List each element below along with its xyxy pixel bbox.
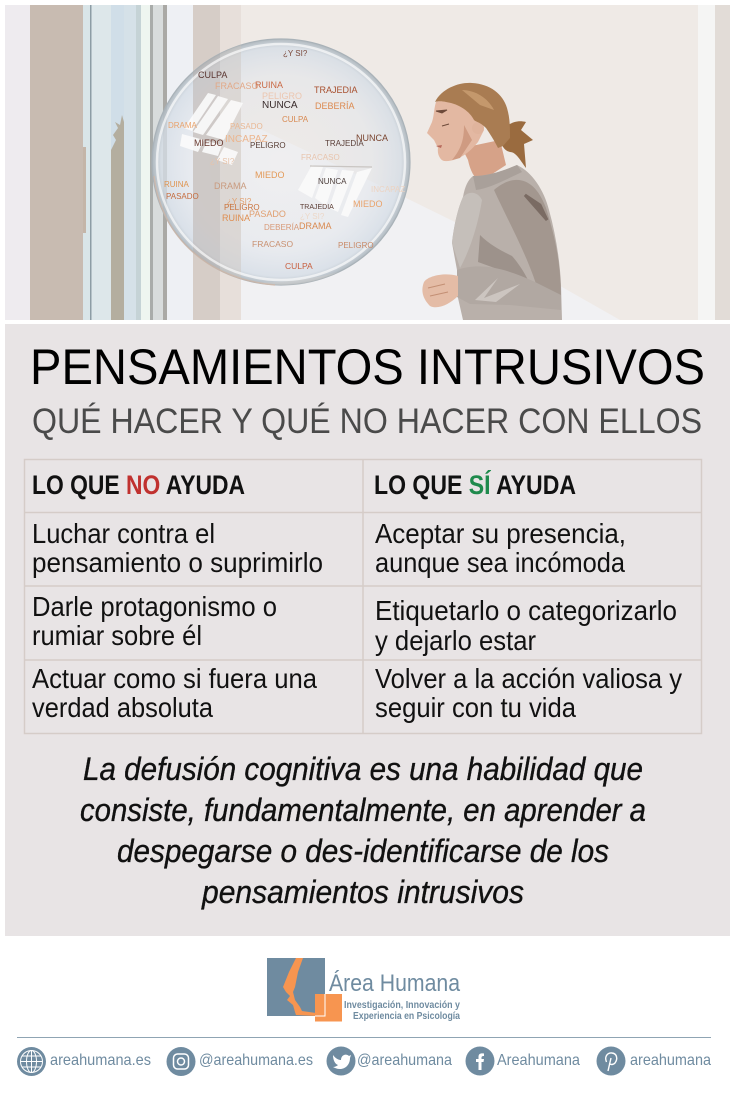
left column rows: rumiar sobre él (32, 620, 202, 651)
title: PENSAMIENTOS INTRUSIVOS (30, 339, 705, 395)
sweater (452, 165, 562, 320)
instagram (166, 1047, 313, 1076)
comparison table (24, 459, 702, 734)
left column rows (32, 518, 323, 723)
pinterest: areahumana (630, 1052, 711, 1069)
right column rows (375, 518, 682, 723)
facebook (466, 1046, 580, 1076)
twitter (326, 1046, 452, 1076)
bubble words: PELIGRO (338, 241, 374, 250)
bubble words: NUNCA (356, 133, 388, 143)
bubble words: MIEDO (255, 170, 285, 180)
bubble words: INCAPAZ (225, 134, 268, 145)
left column rows: Actuar como si fuera una (32, 663, 317, 694)
hands (422, 274, 458, 307)
neck (465, 141, 506, 176)
face (427, 101, 484, 162)
bubble words: DEBERÍA (264, 223, 300, 232)
facebook: Areahumana (497, 1052, 580, 1069)
bubble words: RUINA (255, 80, 283, 90)
illustration: woman looking at a thought bubble (5, 5, 730, 320)
bubble words: DRAMA (214, 181, 247, 191)
left column rows: pensamiento o suprimirlo (32, 547, 323, 578)
right column rows: aunque sea incómoda (375, 547, 625, 578)
left column rows: Darle protagonismo o (32, 591, 277, 622)
bubble words: FRACASO (301, 153, 340, 162)
bubble words: NUNCA (262, 100, 298, 111)
italic statement: La defusión cognitiva es una habilidad que (83, 751, 643, 787)
bubble words: INCAPAZ (371, 185, 405, 194)
left column rows: Luchar contra el (32, 518, 215, 549)
right column rows: Aceptar su presencia, (375, 518, 626, 549)
logo: Área Humana: Investigación, Innovación y (344, 1000, 460, 1011)
ponytail (501, 121, 533, 168)
pinterest (596, 1046, 711, 1076)
header: lo que sí ayuda: LO QUE SÍ AYUDA (374, 469, 576, 500)
bubble words: RUINA (164, 180, 190, 189)
bubble words: PASADO (249, 209, 286, 219)
left column rows: verdad absoluta (32, 692, 213, 723)
italic statement: pensamientos intrusivos (201, 874, 524, 910)
window reflections (180, 93, 372, 217)
text panel (5, 324, 730, 936)
website: areahumana.es (50, 1052, 151, 1069)
bubble words: MIEDO (353, 199, 383, 209)
header: lo que no ayuda: LO QUE NO AYUDA (32, 470, 245, 500)
bubble words: TRAJEDIA (325, 139, 364, 148)
bubble words: FRACASO (215, 81, 259, 91)
right column rows: Etiquetarlo o categorizarlo (375, 595, 677, 626)
italic statement: consiste, fundamentalmente, en aprender a (80, 792, 646, 828)
bubble words: DRAMA (168, 121, 198, 130)
website (17, 1047, 151, 1076)
right column rows: y dejarlo estar (375, 625, 536, 656)
bubble words: ¿Y SI? (227, 197, 252, 206)
logo: Área Humana (267, 958, 461, 1022)
bubble (152, 30, 410, 300)
bubble words: PELIGRO (262, 91, 302, 101)
bubble words: NUNCA (318, 177, 347, 186)
icon: profile logo (267, 958, 342, 1022)
bubble words: TRAJEDIA (314, 85, 358, 95)
bubble words: DRAMA (299, 221, 332, 231)
bubble words: FRACASO (252, 239, 293, 249)
hair (435, 83, 510, 148)
bubble words: CULPA (285, 261, 313, 271)
right column rows: Volver a la acción valiosa y (375, 663, 682, 694)
italic statement (80, 751, 646, 910)
woman (422, 83, 562, 320)
bubble words: RUINA (222, 213, 250, 223)
bubble words: MIEDO (194, 138, 224, 148)
bubble words: PASADO (230, 122, 263, 131)
logo: Área Humana: Experiencia en Psicología (353, 1011, 460, 1022)
bubble words: TRAJEDIA (300, 204, 334, 211)
social links (17, 1046, 711, 1076)
bubble words: CULPA (198, 70, 227, 80)
italic statement: despegarse o des-identificarse de los (117, 833, 609, 869)
bubble words: PELIGRO (224, 203, 260, 212)
floor light (241, 148, 620, 320)
right column rows: seguir con tu vida (375, 692, 576, 723)
bubble words: ¿Y SI? (283, 49, 308, 58)
bubble words (164, 49, 405, 271)
bubble words: PELIGRO (250, 141, 286, 150)
bubble words: ¿Y SI? (300, 212, 325, 221)
twitter: @areahumana (357, 1052, 452, 1069)
bubble words: PASADO (166, 192, 199, 201)
logo: Área Humana: Área Humana (329, 970, 461, 997)
bubble words: ¿Y SI? (210, 157, 235, 166)
bubble words: CULPA (282, 115, 309, 124)
bubble words: DEBERÍA (315, 101, 355, 111)
instagram: @areahumana.es (199, 1052, 313, 1069)
